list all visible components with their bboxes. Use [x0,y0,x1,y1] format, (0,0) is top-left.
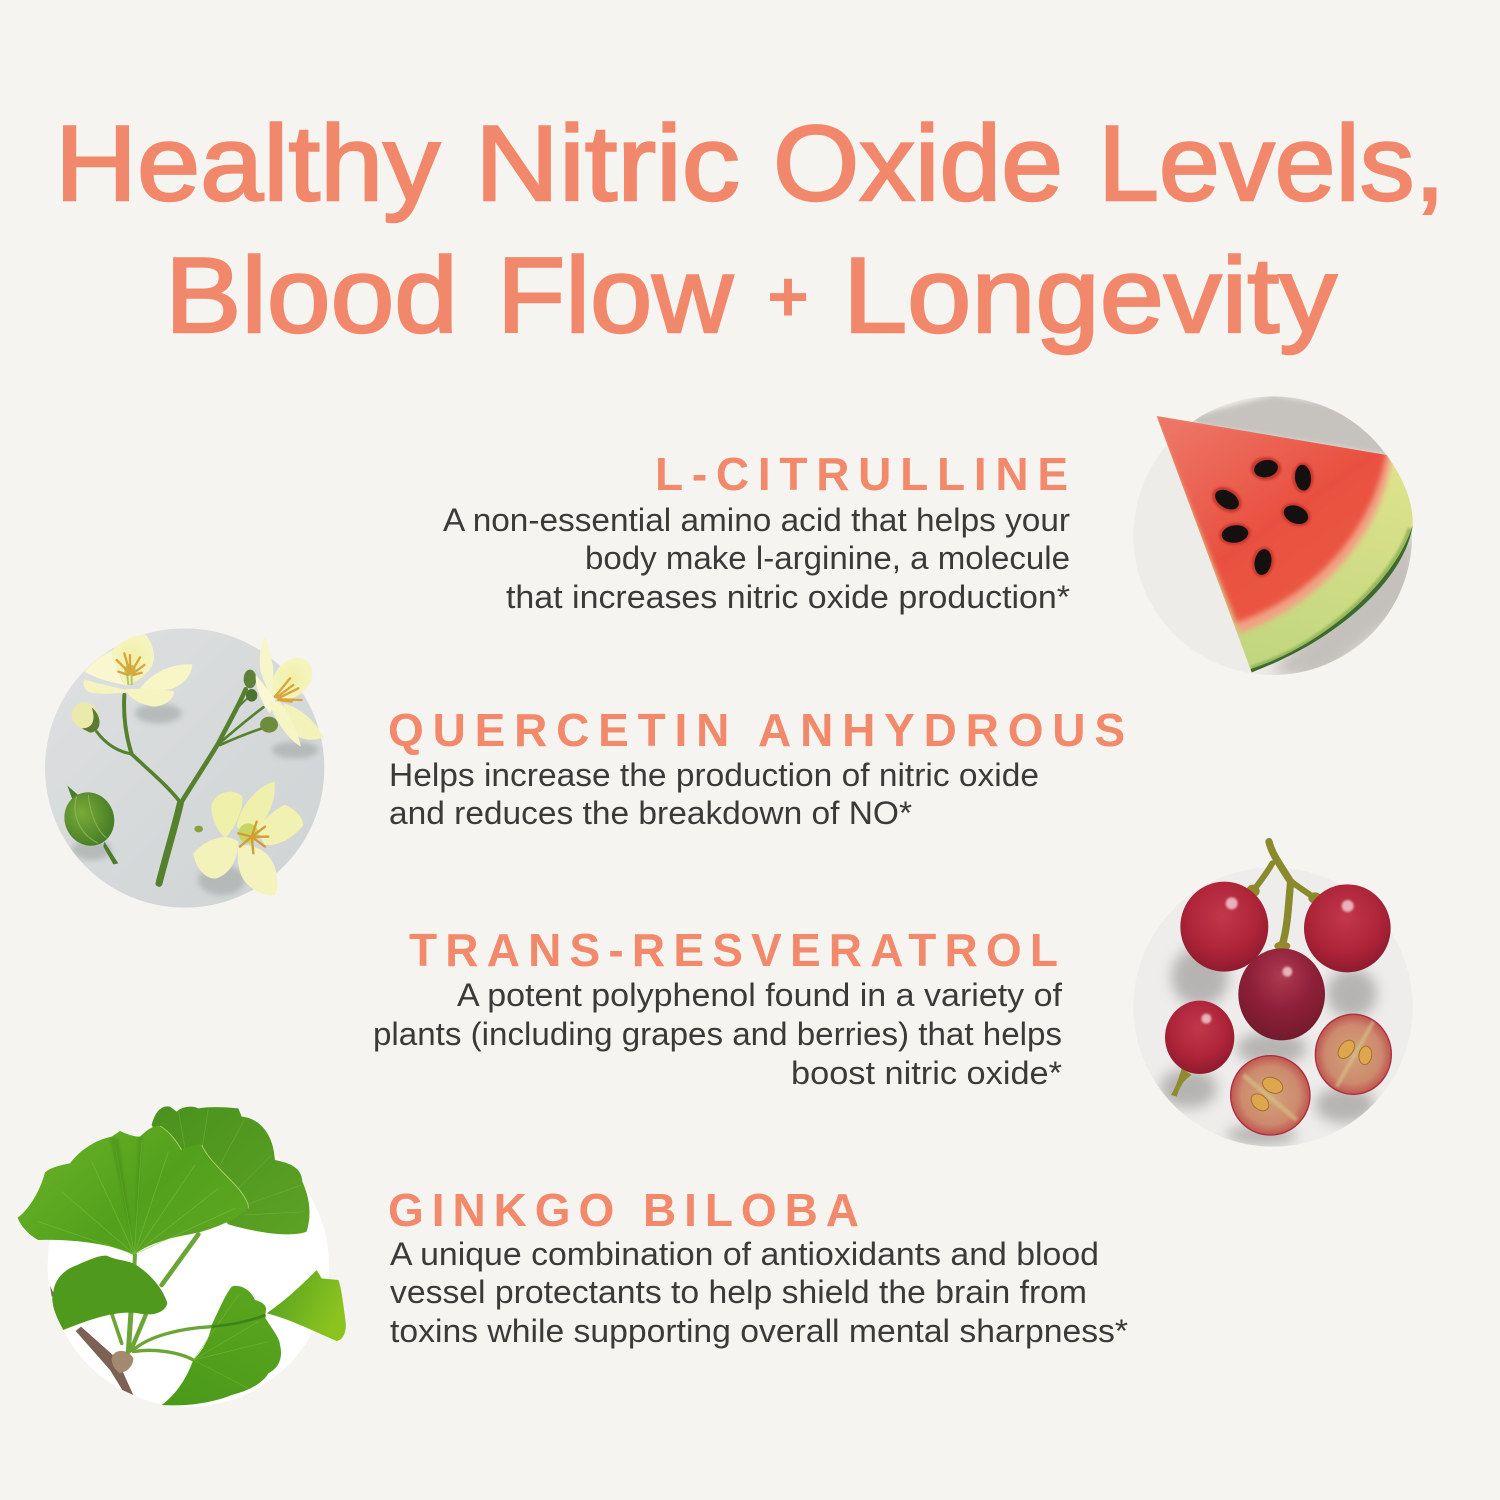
stems [97,689,265,883]
flower 1 [84,634,192,706]
stems [1253,842,1315,945]
title: + [767,257,809,337]
description: quercetin: Helps increase the production of nitric oxide [389,757,1039,793]
panel: quercetin text [388,704,1125,831]
title: Oxide [773,103,1063,223]
icon: watermelon slice [1156,396,1413,675]
flower 3 [193,782,303,895]
description: quercetin: and reduces the breakdown of NO* [389,795,912,831]
description: l-citrulline: A non-essential amino acid that helps your [443,502,1070,538]
leaf: small left [52,1256,167,1330]
title: Levels, [1098,103,1445,223]
title [55,103,1445,355]
leaf: lower [162,1286,281,1405]
bud [71,702,100,732]
leaf: right [267,1270,346,1341]
icon: quercetin flowers [45,628,324,908]
panel: ginkgo biloba text [388,1184,1128,1349]
title: Healthy [55,103,441,223]
stems [112,1234,212,1360]
icon: ginkgo biloba leaves [18,1106,346,1407]
title: Flow [497,235,734,355]
seeds [1248,1037,1373,1114]
highlights [1201,897,1354,1024]
flower 2 [256,637,323,747]
title: Blood [165,235,458,355]
description: ginkgo biloba: A unique combination of antioxidants and blood [390,1236,1099,1272]
description: quercetin [389,757,1039,831]
panel: trans-resveratrol text [373,924,1062,1091]
shadows [1160,947,1377,1145]
leaf: main [18,1126,248,1255]
description: trans-resveratrol: A potent polyphenol found in a variety of [457,977,1062,1013]
heading: l-citrulline: L-CITRULLINE [655,448,1068,500]
description: trans-resveratrol: boost nitric oxide* [791,1055,1062,1091]
seeds [1207,457,1314,579]
heading: quercetin anhydrous: QUERCETIN ANHYDROUS [388,704,1125,756]
description: l-citrulline: that increases nitric oxide production* [506,579,1070,615]
description: ginkgo biloba [390,1236,1128,1349]
grape halves [1231,1056,1310,1135]
description: ginkgo biloba: vessel protectants to help shield the brain from [390,1274,1087,1310]
whole grapes [1180,882,1268,972]
description: ginkgo biloba: toxins while supporting overall mental sharpness* [390,1313,1128,1349]
seed pod [57,785,122,864]
twig [50,1286,133,1395]
description: l-citrulline: body make l-arginine, a molecule [585,540,1070,576]
heading: trans-resveratrol: TRANS-RESVERATROL [409,924,1058,976]
heading: ginkgo biloba: GINKGO BILOBA [388,1184,859,1236]
description: trans-resveratrol: plants (including grapes and berries) that helps [373,1016,1062,1052]
title: Longevity [843,235,1338,355]
leaf: back [152,1106,310,1234]
panel: l-citrulline text [443,448,1070,615]
soft shadows [72,703,318,895]
title: Nitric [475,103,740,223]
icon: red grapes [1150,838,1392,1146]
description: l-citrulline [443,502,1070,615]
description: trans-resveratrol [373,977,1062,1091]
